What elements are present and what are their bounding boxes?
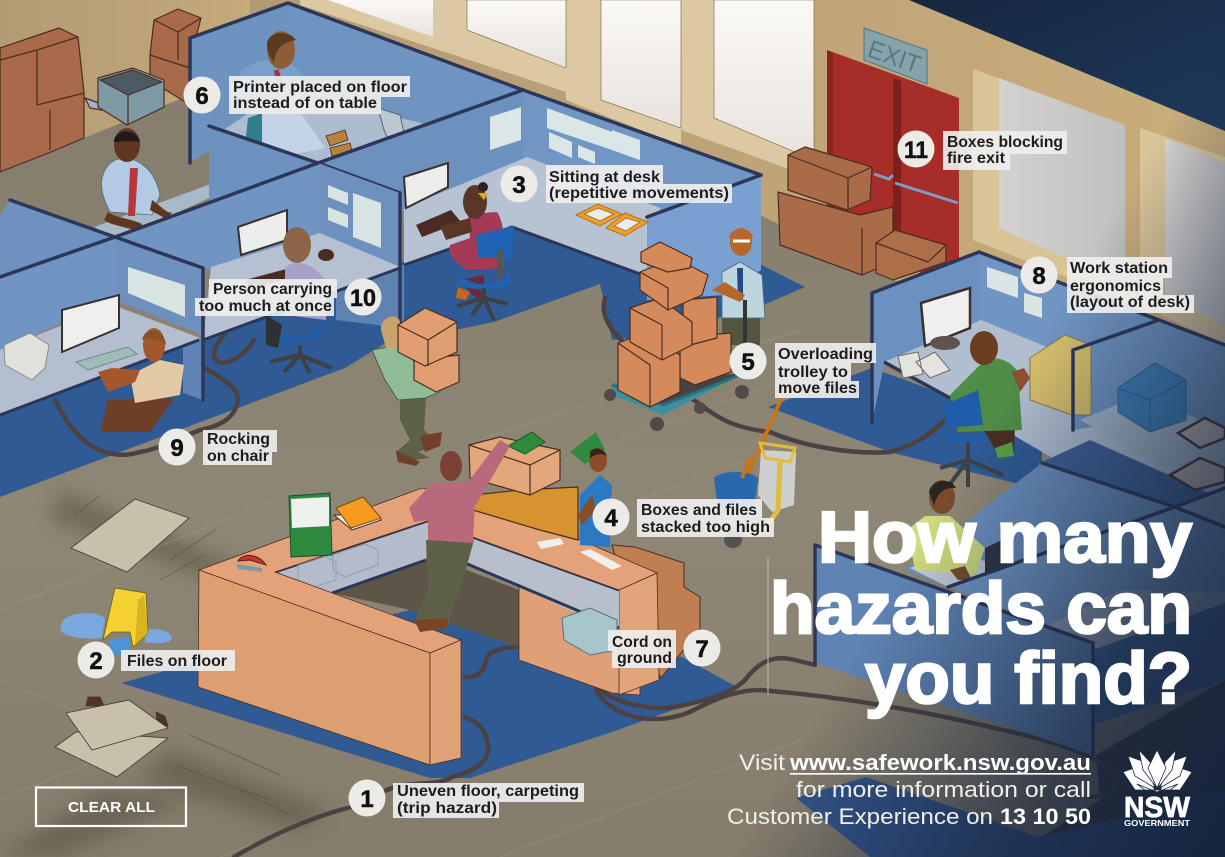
man pushing bbox=[712, 228, 765, 345]
person 2 bbox=[94, 128, 222, 240]
hazard 6: 6 bbox=[195, 83, 209, 110]
contact details: for more information or call bbox=[796, 777, 1091, 802]
left wall bbox=[318, 90, 523, 225]
under desk bbox=[1042, 440, 1225, 530]
title: you find? bbox=[865, 639, 1192, 719]
lower wall bbox=[400, 265, 404, 333]
desk 2 bbox=[1080, 395, 1225, 480]
hazard 7 bbox=[608, 630, 720, 668]
hazard 6 bbox=[184, 76, 410, 114]
waratah flower bbox=[1123, 750, 1192, 792]
mouse bbox=[318, 249, 334, 261]
hazard 4 bbox=[592, 498, 774, 537]
hazard 8: (layout of desk) bbox=[1070, 294, 1190, 311]
hazard 11: fire exit bbox=[947, 150, 1005, 167]
hazard 5: Overloading bbox=[778, 346, 873, 363]
hazard 11 bbox=[898, 130, 1067, 170]
hazard 6: instead of on table bbox=[233, 95, 377, 112]
hazard 7: 7 bbox=[695, 636, 709, 663]
hazard 5: trolley to bbox=[778, 364, 848, 381]
contact details: Customer Experience on bbox=[727, 804, 993, 829]
monitor bbox=[238, 210, 287, 255]
left shelf bbox=[275, 520, 430, 593]
dark corner above wall bbox=[909, 0, 1225, 131]
carpet under cubicle 8 bbox=[768, 368, 1042, 490]
hazard 7: Cord on bbox=[612, 634, 672, 651]
person 3 bbox=[440, 182, 514, 320]
right arm body bbox=[519, 587, 640, 695]
desk bbox=[1045, 590, 1225, 650]
monitor bbox=[62, 295, 119, 352]
green file on box bbox=[508, 432, 545, 454]
desk bbox=[884, 320, 1225, 500]
NSW Government logo bbox=[1123, 750, 1192, 828]
person 6 bbox=[234, 31, 352, 156]
panel end bbox=[183, 338, 203, 400]
title bbox=[770, 498, 1192, 719]
boxes blocking fire exit bbox=[778, 147, 946, 280]
title: How many bbox=[818, 498, 1192, 578]
orange folder bbox=[334, 497, 381, 530]
stacked boxes bbox=[618, 242, 731, 407]
hazard 10: too much at once bbox=[199, 298, 332, 315]
person yellow bbox=[907, 480, 985, 580]
poster bbox=[128, 267, 185, 317]
hazard 6: Printer placed on floor bbox=[233, 79, 407, 96]
posters bbox=[328, 185, 381, 248]
exit door bbox=[827, 50, 959, 290]
interior shadow bbox=[332, 556, 519, 647]
back left wall bbox=[0, 0, 300, 172]
monitor bbox=[921, 288, 970, 346]
hazard 7: ground bbox=[617, 650, 672, 667]
hazard 3: Sitting at desk bbox=[549, 169, 660, 186]
contact details bbox=[727, 750, 1091, 829]
right wall bbox=[288, 3, 523, 140]
clear all button: CLEAR ALL bbox=[68, 799, 155, 816]
icon: printer on floor bbox=[85, 68, 164, 125]
keyboard bbox=[76, 347, 137, 370]
side wall bbox=[115, 237, 203, 335]
stacked boxes on counter bbox=[469, 437, 578, 540]
clear storage boxes bbox=[298, 544, 378, 588]
hazard 9: 9 bbox=[170, 435, 184, 462]
hazard 9: on chair bbox=[207, 448, 269, 465]
hazard 9: Rocking bbox=[207, 431, 270, 448]
hazard 8: Work station bbox=[1070, 260, 1168, 277]
person 4 with green file bbox=[570, 432, 612, 547]
front panel bbox=[815, 545, 1093, 755]
contact details: Visit bbox=[739, 750, 785, 775]
wire tray bbox=[562, 608, 617, 655]
hazard 5: 5 bbox=[741, 349, 755, 376]
cubicle 6 bbox=[94, 3, 523, 240]
blue box bbox=[1118, 363, 1186, 432]
NSW Government logo: NSW bbox=[1124, 792, 1191, 824]
counter top bbox=[199, 488, 657, 653]
hazard 10: Person carrying bbox=[213, 281, 332, 298]
hazard 1: Uneven floor, carpeting bbox=[397, 783, 579, 800]
in trays bbox=[576, 204, 648, 236]
carpet under rear cubicles bbox=[0, 262, 402, 497]
right end bbox=[619, 573, 659, 695]
person 8 bbox=[940, 331, 1030, 487]
papers on counter bbox=[537, 538, 564, 549]
hazard 8: 8 bbox=[1032, 263, 1046, 290]
hazard 4: Boxes and files bbox=[641, 502, 757, 519]
wet floor sign and puddle bbox=[60, 588, 172, 657]
hazard 3: (repetitive movements) bbox=[549, 185, 729, 202]
desk bbox=[404, 157, 660, 280]
rear panel bbox=[905, 463, 1175, 587]
hazard 3: 3 bbox=[512, 172, 526, 199]
left wall bbox=[872, 252, 979, 423]
person pink bbox=[409, 440, 510, 632]
trays bbox=[1178, 418, 1225, 448]
end face bbox=[430, 640, 461, 765]
long face bbox=[198, 570, 430, 765]
desk 2 bbox=[910, 548, 1000, 587]
cords bbox=[55, 298, 1117, 857]
title: hazards can bbox=[770, 569, 1192, 649]
green binder bbox=[289, 493, 332, 557]
cubicle 8 bbox=[872, 252, 1225, 530]
keyboard on counter bbox=[580, 549, 622, 570]
boxes at left wall bbox=[0, 9, 201, 172]
hazard 4: stacked too high bbox=[641, 519, 770, 536]
posters bbox=[987, 267, 1018, 298]
hazard 11: Boxes blocking bbox=[947, 134, 1063, 151]
contact details: www.safework.nsw.gov.au bbox=[789, 750, 1091, 775]
trolley base bbox=[612, 373, 745, 415]
mop bucket and bin bbox=[714, 397, 796, 548]
hazard 8 bbox=[1020, 256, 1194, 313]
filing cabinet bbox=[1030, 335, 1091, 415]
cubicle 10 bbox=[115, 163, 402, 373]
carpet bottom right bbox=[796, 773, 1225, 857]
hazard 11: 11 bbox=[904, 137, 928, 164]
hazard 10: 10 bbox=[350, 285, 376, 312]
hazard 8: ergonomics bbox=[1070, 278, 1161, 295]
stapler bbox=[236, 555, 266, 572]
papers bbox=[898, 352, 950, 378]
hazard 4: 4 bbox=[604, 505, 618, 532]
left wall bbox=[190, 3, 288, 163]
reception counter bbox=[198, 432, 700, 765]
panel end bbox=[647, 175, 761, 300]
cubicle 9 bbox=[0, 200, 203, 432]
hazard 5: move files bbox=[778, 380, 857, 397]
person carrying boxes bbox=[372, 308, 459, 466]
desk bbox=[209, 92, 430, 190]
keyboard bbox=[416, 210, 461, 237]
monitor bbox=[985, 536, 1010, 576]
carpet under cubicle 3 bbox=[402, 225, 805, 340]
hazard 2: 2 bbox=[89, 648, 103, 675]
hazard 3 bbox=[500, 165, 732, 203]
NSW Government logo: GOVERNMENT bbox=[1124, 818, 1191, 828]
hazard 9 bbox=[158, 428, 277, 466]
back wall bbox=[523, 90, 761, 270]
trolley with boxes bbox=[604, 228, 765, 431]
hazard 10 bbox=[195, 278, 382, 316]
hazard 2: Files on floor bbox=[127, 653, 227, 670]
side wall bbox=[318, 163, 400, 268]
floor tile lines bbox=[0, 330, 800, 857]
monitor 3 bbox=[404, 163, 448, 208]
person 9 bbox=[98, 328, 184, 432]
hazard 5 bbox=[730, 342, 876, 398]
floor scratch lines bbox=[75, 495, 290, 815]
back wall bbox=[979, 252, 1225, 440]
hazard 2 bbox=[78, 642, 235, 678]
back right wall bbox=[250, 0, 1225, 440]
clear all button bbox=[36, 788, 186, 826]
right shelf bbox=[465, 535, 619, 632]
boxes behind counter bbox=[612, 545, 700, 678]
hazard 1: (trip hazard) bbox=[397, 800, 497, 817]
desk bbox=[203, 233, 400, 340]
floor shadows bbox=[0, 490, 330, 857]
files on floor bbox=[55, 499, 189, 777]
hazard 1: 1 bbox=[360, 786, 374, 813]
monitor back bbox=[378, 108, 408, 155]
carpet under reception bbox=[121, 610, 737, 778]
paper stack bbox=[4, 333, 49, 380]
bottom right cubicle bbox=[768, 463, 1225, 755]
back wall bbox=[0, 200, 115, 277]
back wall bbox=[115, 163, 320, 270]
contact details: 13 10 50 bbox=[1000, 804, 1091, 829]
panel beside person 2 bbox=[209, 126, 318, 206]
lower panel bbox=[336, 268, 402, 333]
hazard 1 bbox=[348, 780, 584, 818]
windows bbox=[300, 0, 1225, 345]
posters bbox=[490, 107, 640, 164]
cubicle 3 bbox=[318, 90, 761, 333]
dark floor bottom right bbox=[1040, 680, 1225, 838]
person 10 bbox=[245, 227, 332, 373]
second panel bbox=[1073, 320, 1225, 448]
exit sign: EXIT bbox=[864, 35, 924, 79]
desk bbox=[0, 305, 200, 415]
